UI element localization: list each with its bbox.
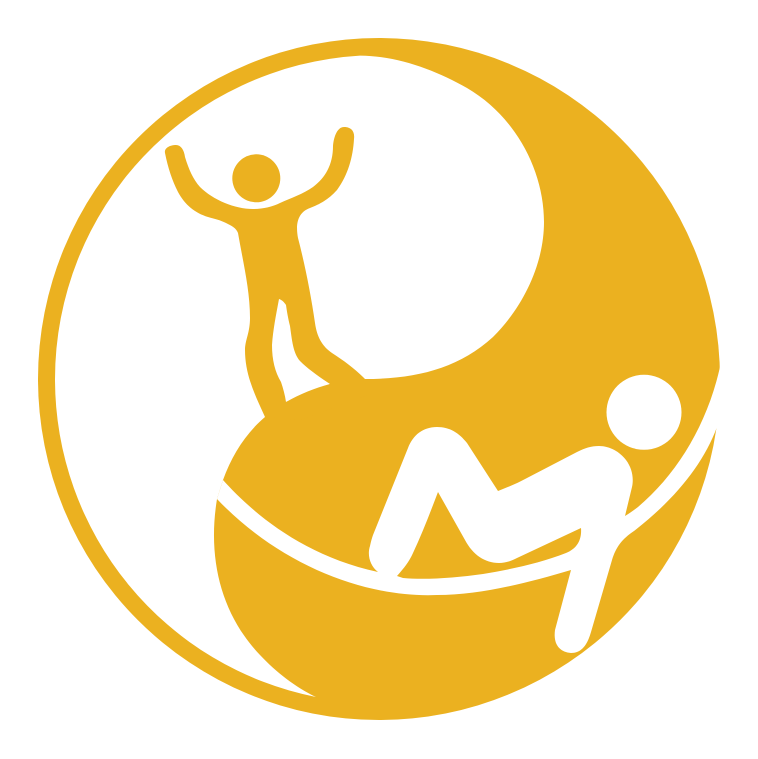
head of standing figure	[232, 154, 280, 202]
body of standing figure	[165, 127, 368, 420]
gold standing figure	[165, 127, 368, 420]
gold gap between legs of lying figure	[397, 492, 581, 579]
white crescent and blob	[55, 56, 544, 697]
white lying figure head	[606, 375, 682, 450]
white lying figure and ball band	[217, 367, 726, 653]
